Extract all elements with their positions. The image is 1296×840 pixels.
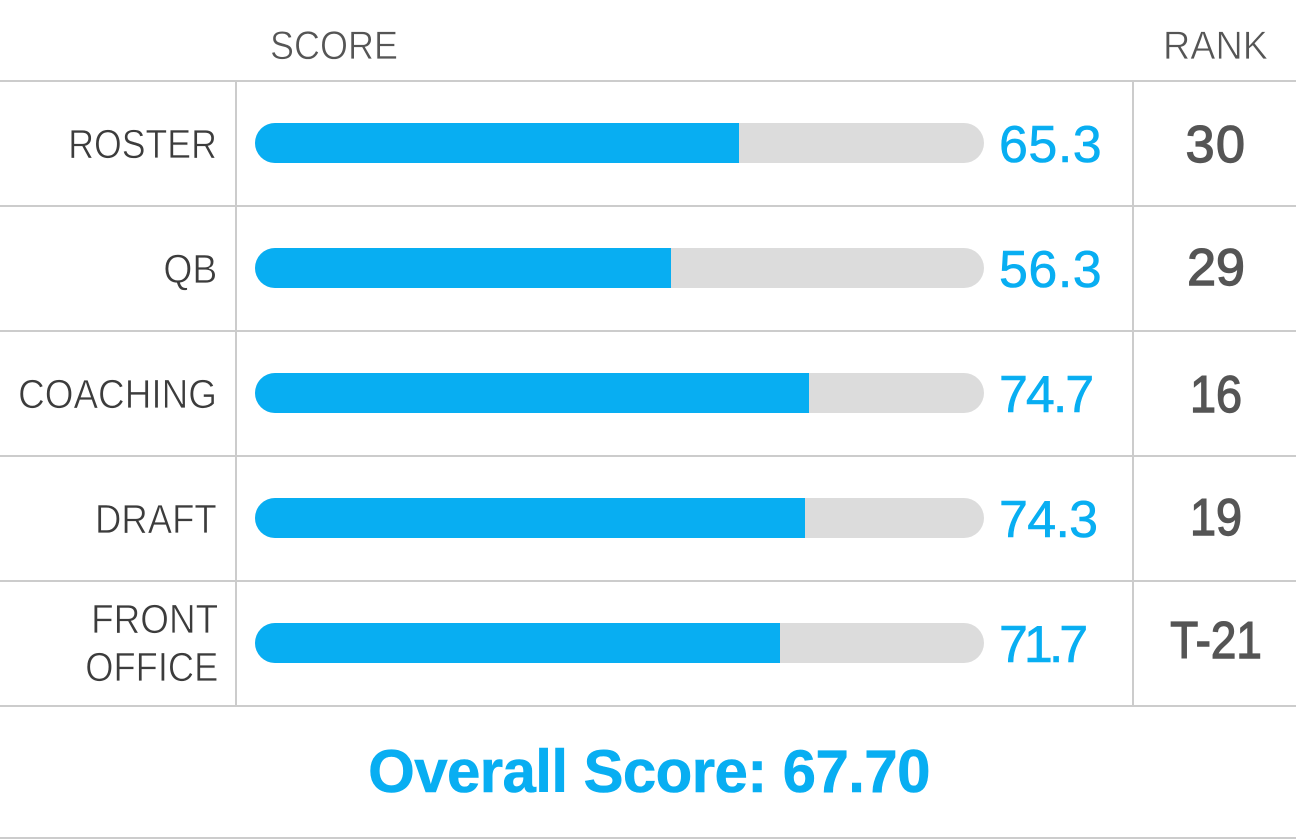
row label: draft: DRAFT xyxy=(95,496,217,542)
row label: front office: OFFICE xyxy=(85,644,218,690)
rank: QB: 29 xyxy=(1187,239,1245,297)
score column header: SCORE xyxy=(270,24,398,68)
bar: front office score xyxy=(255,623,984,663)
row label: front office xyxy=(85,596,218,690)
value: QB score: 56.3 xyxy=(999,241,1102,299)
row label: coaching: COACHING xyxy=(18,371,217,417)
bar: draft score xyxy=(255,498,984,538)
rank: roster: 30 xyxy=(1186,116,1246,174)
rank: front office: T-21 xyxy=(1170,612,1262,670)
value: roster score: 65.3 xyxy=(999,116,1102,174)
bar: QB score xyxy=(255,248,984,288)
bar: coaching score xyxy=(255,373,984,413)
rank: draft: 19 xyxy=(1190,489,1242,547)
value: draft score: 74.3 xyxy=(999,491,1097,549)
row label: roster: ROSTER xyxy=(68,121,217,167)
rank: coaching: 16 xyxy=(1190,366,1242,424)
row label: QB: QB xyxy=(163,246,217,292)
rank column header: RANK xyxy=(1163,24,1268,68)
value: front office score: 71.7 xyxy=(999,616,1084,674)
row label: front office: FRONT xyxy=(91,596,218,642)
value: coaching score: 74.7 xyxy=(999,366,1092,424)
overall score: Overall Score: 67.70 xyxy=(368,738,930,805)
bar: roster score xyxy=(255,123,984,163)
